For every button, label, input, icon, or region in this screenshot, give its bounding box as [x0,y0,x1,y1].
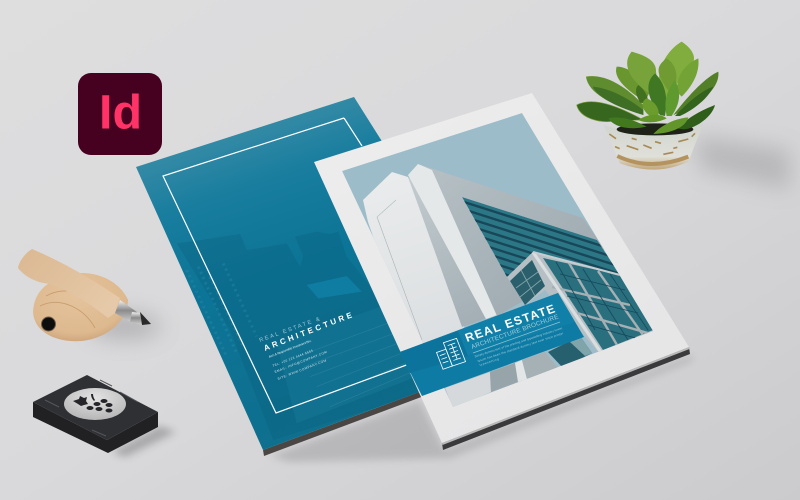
shadows under objects [89,135,790,462]
teal glass facade [462,197,621,278]
icon: building line art [434,338,466,369]
potted plant [577,42,718,170]
front building [507,252,660,354]
wooden base [33,273,128,341]
panel: front cover brochure [314,93,690,450]
metal pencil tip [115,300,137,323]
second white tower [408,164,497,319]
back cover text block: TEL: +00 123 4444 5555 [272,349,314,368]
sky [342,113,653,407]
front cover page thickness [442,347,690,450]
window grid [552,263,648,345]
succulent leaves [577,42,718,134]
front cover photo of building [342,113,660,408]
lower tower blocks [445,372,491,408]
stone top [33,375,158,440]
left white tower [363,172,464,344]
band text: real estate: REAL ESTATE [463,302,557,345]
stone sides [33,402,158,453]
back cover page [136,97,430,450]
back cover text block: REAL ESTATE & [259,316,321,344]
icon: InDesign app logo: Id [99,86,142,140]
back cover text block: EMAIL: INFO@COMPANY.COM [274,350,328,374]
back cover page edge [263,388,432,456]
band paragraph: typesetting [479,357,500,367]
blue title band [400,293,584,396]
stone block with metal disc [33,375,158,453]
pencil holder [18,249,151,341]
back cover text block: Arch & Responsible Investment Bro. [268,339,312,359]
plant pot [603,123,703,170]
facade glass [543,258,653,350]
band paragraph: ipsum has been the standard dummy text ever since printer [477,331,564,363]
panel: back cover brochure [136,97,432,456]
front cover white page [314,93,689,443]
grey facade [418,164,605,316]
metal disc [64,388,126,420]
disc cut-out leaf and grapes [73,394,112,412]
back cover white frame [163,118,420,413]
tower shaded strip [408,177,487,327]
front building frame [507,252,660,354]
wooden pencil [18,249,120,318]
small corner window [510,260,545,305]
back cover skyline photo [177,232,418,407]
icon: InDesign app logo [78,73,162,155]
frame edge [533,252,602,354]
back cover text block: ARCHITECTURE [263,311,353,353]
black hole [42,317,56,331]
back cover text block [259,311,353,381]
lower dark window [548,338,592,366]
back cover text block: SITE: WWW.COMPANY.COM [277,358,327,381]
band paragraph: Simply dummy text of the printing and typesetting industry lorem [474,326,563,358]
band text: architecture brochure: ARCHITECTURE BROCHURE [470,314,560,351]
